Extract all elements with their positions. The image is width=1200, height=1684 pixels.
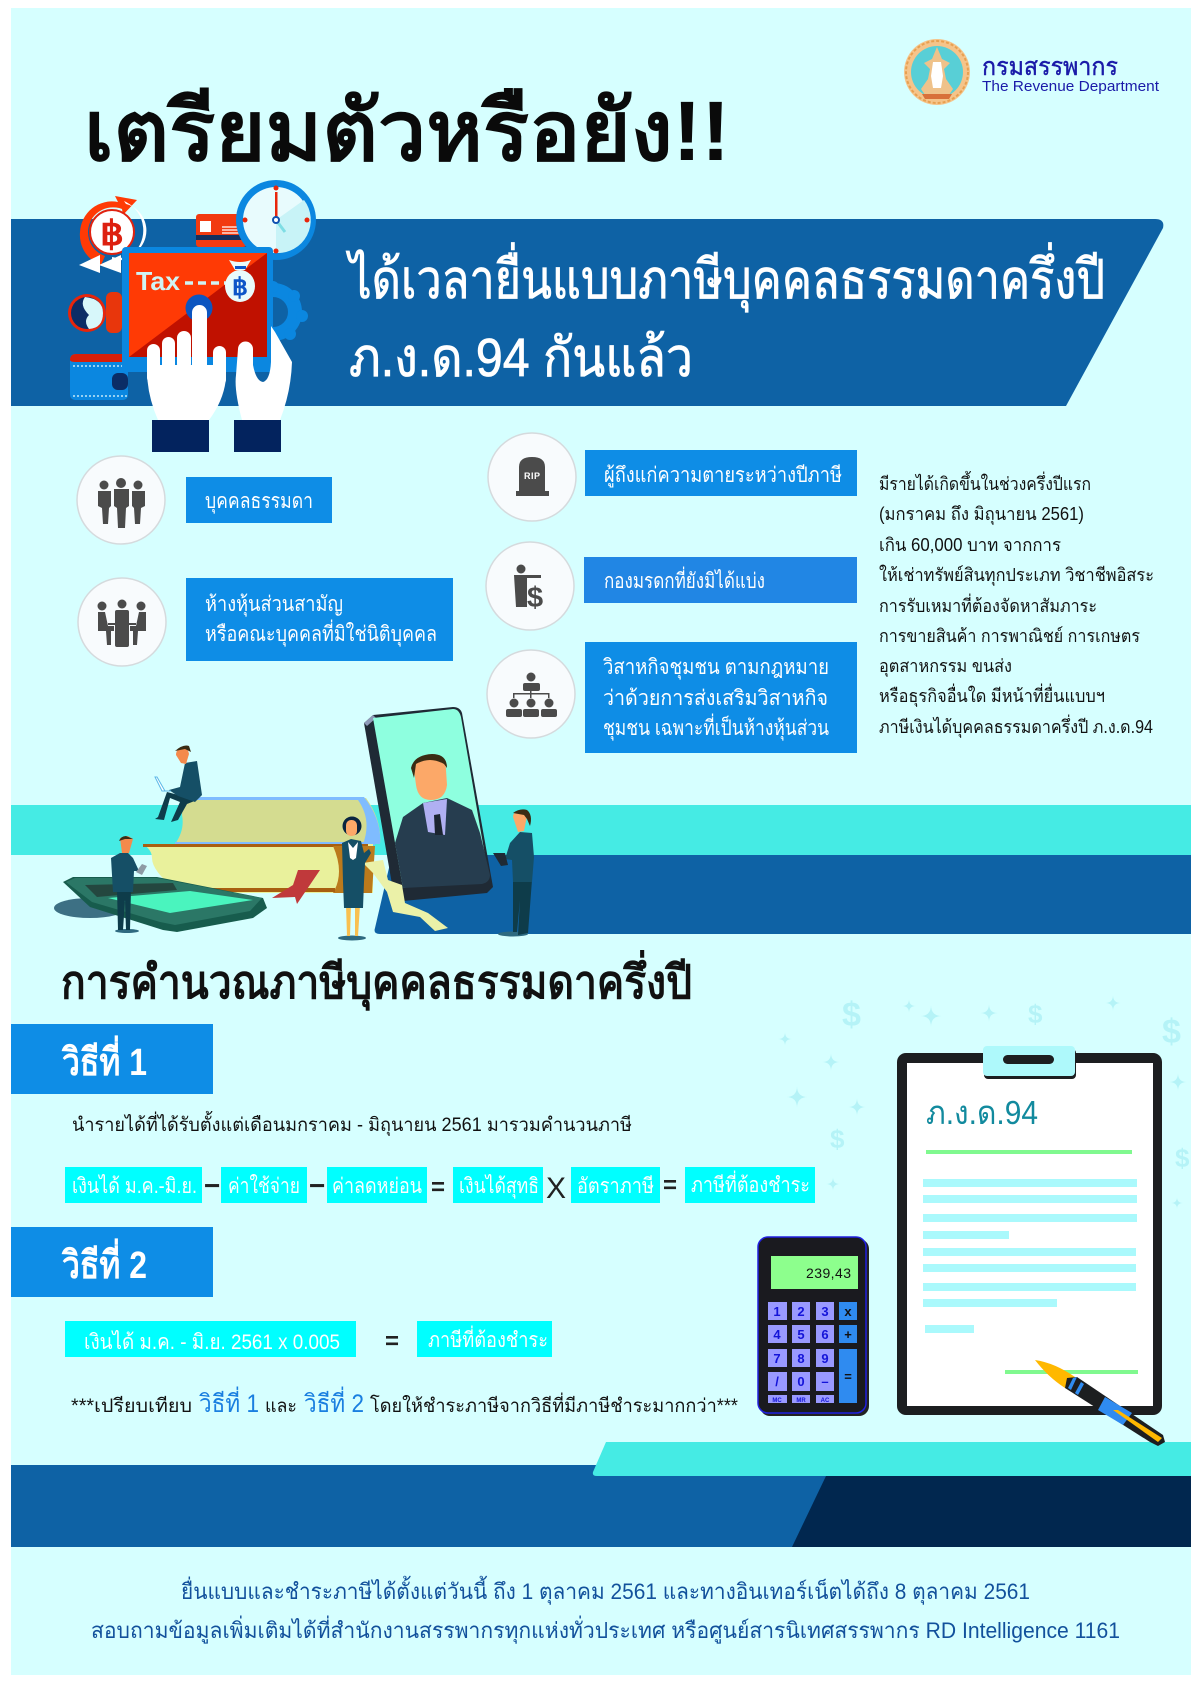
illustration: clipboard form [897,1046,1165,1446]
calculator [54,877,267,932]
illustration: calculator: 3 [821,1304,829,1319]
illustration: calculator: 7 [773,1351,781,1366]
illustration: tax tablet and hands [68,180,316,452]
icon circle: RIP tombstone [488,433,576,521]
method 2 formula: = [385,1328,399,1355]
label: community enterprise [585,642,857,753]
illustration: calculator: 4 [773,1327,781,1342]
text block: income conditions: ภาษีเงินได้บุคคลธรรมดาครึ่งปี ภ.ง.ด.94 [879,714,1153,738]
text block: income conditions: หรือธุรกิจอื่นใด มีหน้าที่ยื่นแบบฯ [879,683,1105,707]
icon circle: community enterprise [487,650,575,738]
method 1 formula: − [204,1170,220,1201]
navy band [375,855,1191,934]
label: undivided estate [584,557,857,603]
label: partnership [186,578,453,661]
logo: The Revenue Department: กรมสรรพากร [982,53,1118,81]
method 1 formula: อัตราภาษี [577,1175,654,1198]
illustration: calculator: AC [821,1398,830,1404]
label: individuals [186,477,332,523]
hands [147,305,292,452]
logo: The Revenue Department [904,39,1160,105]
comparison note [71,1386,739,1418]
illustration: books, phone, calculator and people [54,707,534,940]
text block: income conditions: การขายสินค้า การพาณิชย์ การเกษตร [879,626,1140,646]
comparison note: ***เปรียบเทียบ [71,1395,192,1417]
person: woman with receipt [338,816,371,940]
icon: credit card [196,214,246,247]
illustration: calculator: 2 [797,1304,805,1319]
decorative dollars and sparkles: $ [842,996,861,1034]
tablet [122,247,273,372]
method 1 formula: เงินได้สุทธิ [459,1174,539,1199]
footer notes: สอบถามข้อมูลเพิ่มเติมได้ที่สำนักงานสรรพากรทุกแห่งทั่วประเทศ หรือศูนย์สารนิเทศสรรพากร RD Intelligence 1161 [91,1615,1120,1644]
text block: income conditions: (มกราคม ถึง มิถุนายน 2561) [879,504,1084,525]
title: เตรียมตัวหรือยัง!! [84,84,730,178]
label: community enterprise: ชุมชน เฉพาะที่เป็นห้างหุ้นส่วน [603,713,829,741]
illustration: calculator: / [775,1374,779,1389]
illustration: calculator: MC [772,1398,782,1404]
label: individuals: บุคคลธรรมดา [205,490,313,514]
text block: income conditions: ให้เช่าทรัพย์สินทุกประเภท วิชาชีพอิสระ [879,564,1154,586]
illustration: calculator: 9 [821,1351,829,1366]
method 1 heading: วิธีที่ 1 [61,1035,147,1084]
tablet: Tax [136,266,181,296]
method 1 formula: เงินได้ ม.ค.-มิ.ย. [72,1174,197,1198]
receipt ribbon [363,860,448,931]
illustration: calculator: 6 [821,1327,829,1342]
upper book [175,797,380,845]
icon circle: estate dollar: $ [527,582,543,614]
method 1 formula [65,1167,815,1205]
label: deceased [585,450,857,496]
method 1 formula: ค่าลดหย่อน [332,1175,422,1198]
footer notes: ยื่นแบบและชำระภาษีได้ตั้งแต่วันนี้ ถึง 1 ตุลาคม 2561 และทางอินเทอร์เน็ตได้ถึง 8 ตุลาคม 2561 [181,1576,1030,1605]
illustration: clipboard form: ภ.ง.ด.94 [926,1094,1038,1131]
decorative dollars and sparkles [778,995,1190,1209]
method 1 formula: ภาษีที่ต้องชำระ [691,1170,810,1197]
bottom band navy [11,1465,1191,1547]
illustration: calculator [758,1237,869,1416]
comparison note: โดยให้ชำระภาษีจากวิธีที่มีภาษีชำระมากกว่า*** [370,1392,739,1417]
method 2 formula: เงินได้ ม.ค. - มิ.ย. 2561 x 0.005 [84,1330,340,1354]
illustration: calculator: 0 [797,1374,805,1389]
phone [364,707,493,901]
label: undivided estate: กองมรดกที่ยังมิได้แบ่ง [604,566,765,593]
decorative dollars and sparkles: $ [1175,1143,1190,1173]
icon circle: RIP tombstone: RIP [524,471,540,481]
cyan band [11,805,1191,855]
person: man on book with laptop [155,746,202,822]
method 1 formula: − [309,1170,325,1201]
method 1 heading [11,1024,213,1094]
icon circle: individuals [77,456,165,544]
icon circle: estate dollar [486,542,574,630]
illustration: calculator: 5 [797,1327,805,1342]
decorative dollars and sparkles: $ [830,1124,845,1154]
illustration: calculator: – [821,1374,829,1389]
illustration: calculator: + [844,1327,852,1342]
method 2 formula: ภาษีที่ต้องชำระ [428,1325,548,1352]
label: partnership: ห้างหุ้นส่วนสามัญ [205,593,343,617]
illustration: calculator: 8 [797,1351,805,1366]
decorative dollars and sparkles: $ [1028,999,1043,1029]
banner [11,219,1163,406]
text block: income conditions: การรับเหมาที่ต้องจัดหาสัมภาระ [879,593,1097,616]
pen [1035,1360,1165,1446]
icon: baht with arrows: ฿ [100,215,124,253]
comparison note: และ [265,1396,297,1417]
text block: income conditions: มีรายได้เกิดขึ้นในช่วงครึ่งปีแรก [879,471,1091,494]
footer notes [91,1576,1120,1644]
section heading: การคำนวณภาษีบุคคลธรรมดาครึ่งปี [61,950,692,1011]
comparison note: วิธีที่ 1 [199,1386,259,1418]
text block: income conditions: อุตสาหกรรม ขนส่ง [879,656,1012,677]
logo: The Revenue Department: The Revenue Department [982,78,1160,95]
method 1 formula: X [546,1172,566,1205]
bottom band dark [792,1476,1191,1547]
illustration: calculator: 1 [773,1304,781,1319]
method 2 heading [11,1227,213,1297]
method 1 formula: ค่าใช้จ่าย [228,1174,300,1198]
label: community enterprise: ว่าด้วยการส่งเสริมวิสาหกิจ [603,687,828,710]
icon: gear [251,281,308,340]
icon: globe [68,292,122,333]
lower book [143,844,375,893]
person: left man with tablet [111,836,147,933]
illustration: calculator: 239,43 [806,1265,851,1281]
text block: income conditions: เกิน 60,000 บาท จากการ [879,535,1061,555]
bookmark [272,870,320,904]
illustration: calculator: x [844,1304,852,1319]
comparison note: วิธีที่ 2 [304,1386,364,1418]
method 2 formula [65,1321,552,1357]
icon circle: partnership [78,578,166,666]
method 1 description: นำรายได้ที่ได้รับตั้งแต่เดือนมกราคม - มิถุนายน 2561 มารวมคำนวนภาษี [72,1111,632,1137]
label: community enterprise: วิสาหกิจชุมชน ตามกฎหมาย [603,656,829,680]
bottom band cyan [593,1442,1191,1476]
banner heading: ภ.ง.ด.94 กันแล้ว [349,328,693,388]
icon: wallet [70,354,128,400]
illustration: calculator: MR [796,1398,806,1404]
method 1 formula: = [431,1174,445,1201]
label: deceased: ผู้ถึงแก่ความตายระหว่างปีภาษี [604,464,842,488]
text block: income conditions [879,471,1154,738]
icon: clock [236,180,316,260]
illustration: calculator: = [844,1369,852,1384]
banner heading [346,242,1105,388]
icon: baht with arrows [79,196,146,273]
method 2 heading: วิธีที่ 2 [61,1238,147,1287]
tablet: ฿ [232,274,248,301]
method 1 formula: = [663,1172,677,1199]
decorative dollars and sparkles: $ [1162,1013,1181,1051]
label: partnership: หรือคณะบุคคลที่มิใช่นิติบุคคล [205,619,437,647]
person: right man with clipboard [493,809,534,936]
